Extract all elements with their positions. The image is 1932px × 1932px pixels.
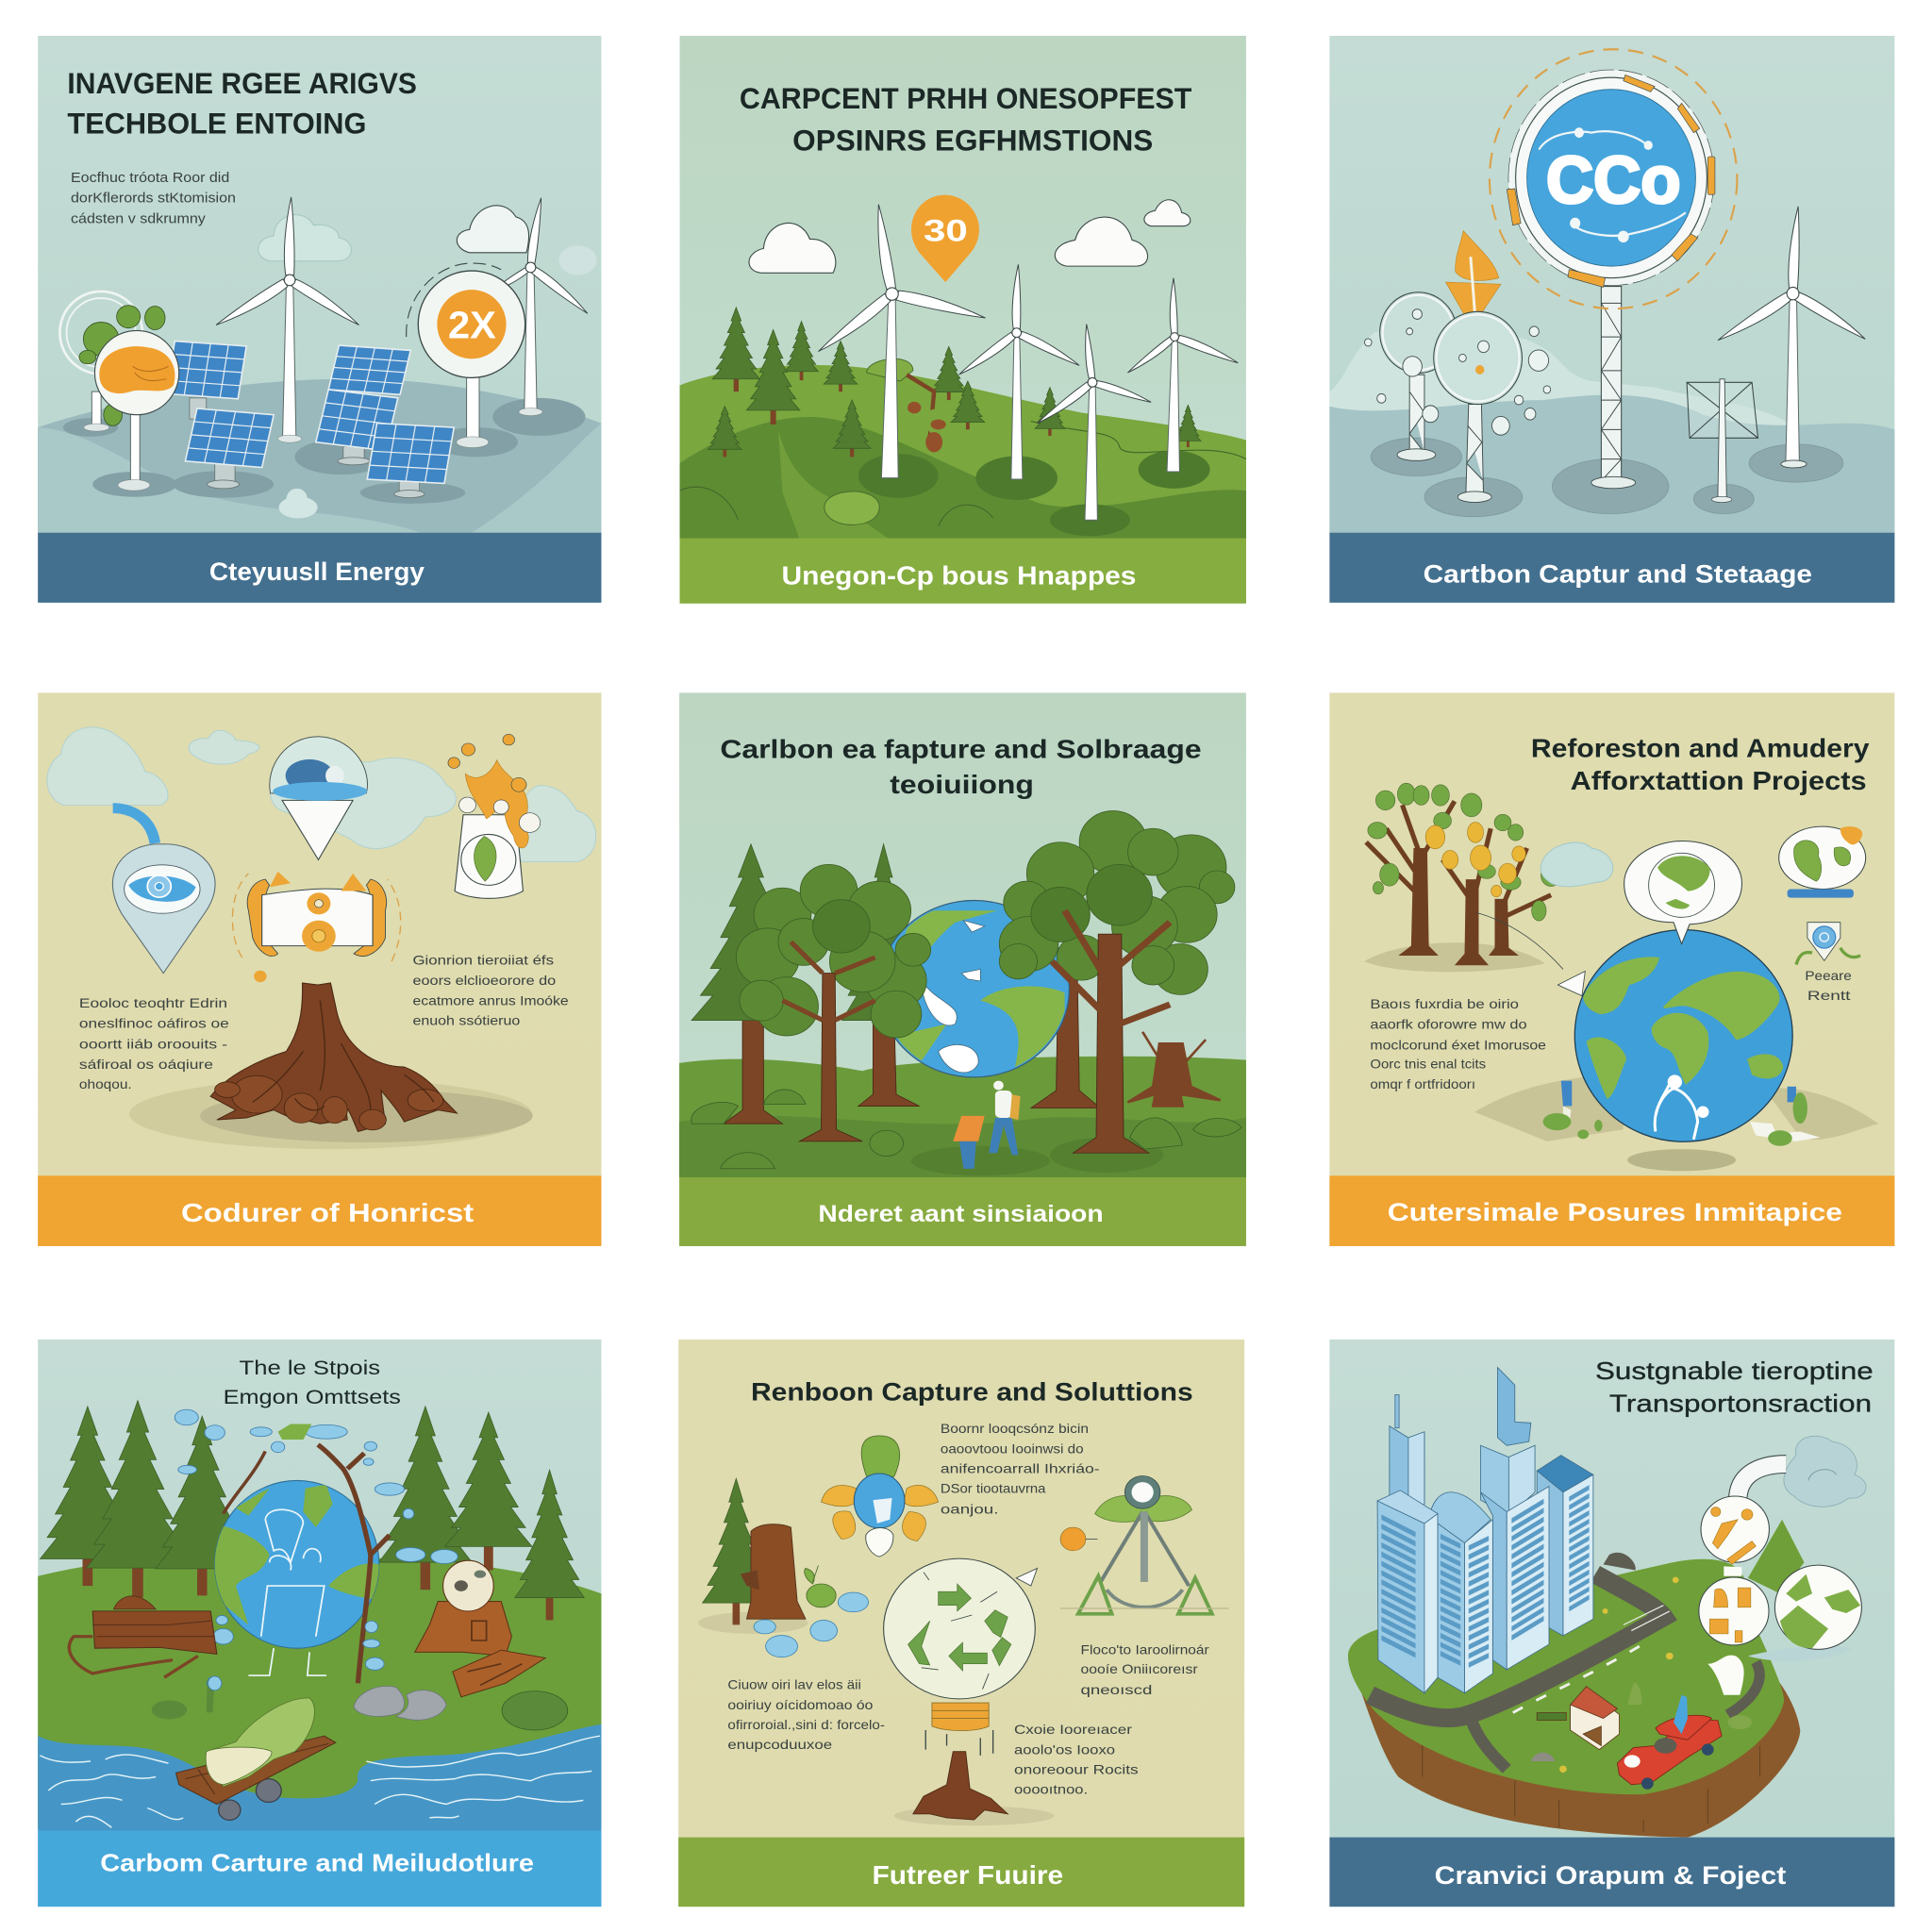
icon: orange location pin: 30 [924, 213, 968, 247]
text block: right: eoors elclioeorore do [412, 974, 556, 989]
text block: top [941, 1423, 1100, 1517]
icon: smoke cloud and pipe [1738, 1436, 1866, 1507]
cart on river [176, 1698, 336, 1820]
text block: left [79, 997, 229, 1092]
river [38, 1724, 601, 1831]
footer bar [680, 538, 1246, 604]
text block: omqr f ortfridoorı [1370, 1076, 1475, 1091]
panel: carbon capture solutions [678, 1340, 1244, 1907]
footer bar: Cutersimale Posures Inmitapice [1388, 1198, 1842, 1226]
footer bar: Cranvici Orapum & Foject [1435, 1862, 1786, 1890]
icon: triangle frame machine [1060, 1475, 1229, 1614]
icon: wind turbines [815, 204, 1240, 520]
text block: right [1081, 1643, 1209, 1698]
footer bar [1329, 1175, 1894, 1246]
icon: middle map pin with cloud [270, 737, 367, 859]
icon: CO2 capture ring: CCo [1546, 143, 1681, 218]
heading: INAVGENE RGEE ARIGVS [67, 67, 417, 100]
log with roots [69, 1596, 217, 1677]
icon: capture spheres with bubbles [1364, 292, 1551, 503]
water droplets and clouds [175, 1409, 458, 1690]
panel: causes of emissions [38, 692, 601, 1246]
icon: wind turbine right [487, 197, 591, 416]
pine trees and back trunks [691, 844, 1100, 1124]
icon: skyscrapers [1377, 1368, 1593, 1693]
heading: Afforxtattion Projects [1571, 766, 1867, 795]
body text: Eocfhuc tróota Roor did [71, 171, 229, 186]
people planting [953, 1081, 1021, 1169]
text block: moclcorund éxet Imorusoe [1370, 1038, 1546, 1052]
green hills [680, 358, 1246, 538]
icon: blue ball with petals [822, 1436, 939, 1557]
text block: right: oooíe Oniiıcoreısr [1081, 1663, 1198, 1677]
globe [879, 901, 1069, 1077]
text block: lower: onoreoour Rocits [1014, 1763, 1139, 1778]
text block: top: oanjou. [941, 1503, 998, 1517]
text block: Baoıs fuxrdia be oirio [1370, 996, 1519, 1011]
clouds [749, 200, 1191, 273]
icon: left map pin with swirl [112, 844, 215, 974]
heading: TECHBOLE ENTOING [67, 108, 366, 141]
text block: top: DSor tiootauvrna [941, 1482, 1046, 1497]
icon: 2X badge on pole: 2X [448, 303, 496, 346]
icon: swirl pin with label [1796, 923, 1860, 1003]
bushes [691, 1090, 1241, 1169]
icon: CO2 capture ring [1490, 49, 1737, 308]
meadow [679, 1057, 1246, 1177]
icon: world globe [1574, 930, 1792, 1141]
text block: top: anifencoarrall Ihxriáo- [941, 1462, 1100, 1476]
pine trees [708, 308, 1201, 457]
rocks [354, 1686, 446, 1720]
meadow [38, 1557, 601, 1827]
heading: Sustgnable tieroptine [1595, 1357, 1874, 1385]
heading: Reforeston and Amudery [1531, 734, 1870, 762]
text block: left: Eooloc teoqhtr Edrin [79, 997, 227, 1011]
text block: left: ofirroroial.,sini d: forcelo- [727, 1719, 885, 1733]
broken stump [1128, 1032, 1221, 1107]
heading: Transportonsraction [1609, 1390, 1872, 1417]
body text [71, 171, 236, 227]
text block [1370, 996, 1546, 1091]
icon: orange location pin [911, 195, 979, 282]
footer bar: Cartbon Captur and Stetaage [1424, 559, 1812, 589]
text block: left: ooiriuy oícidomoao óo [727, 1699, 874, 1713]
icon: leaf jar with flames [448, 734, 541, 898]
text block: right: Floco'to Iaroolirnoár [1081, 1643, 1209, 1657]
heading: Carlbon ea fapture and Solbraage [720, 736, 1202, 764]
bare tree over globe [224, 1444, 390, 1683]
icon: swirl pin with label: Peeare [1805, 968, 1852, 983]
icon: cross-braced frame [1687, 379, 1758, 503]
icon: orange flame marker [1446, 231, 1501, 322]
panel: sustainable transport [1329, 1340, 1894, 1907]
ground shadow [129, 1079, 533, 1149]
heading [740, 82, 1191, 157]
deciduous tree left [736, 864, 931, 1141]
panel: renewable energy [38, 36, 601, 603]
ground shapes [1364, 942, 1878, 1171]
icon: swirl pin with label: Rentt [1807, 988, 1851, 1003]
footer bar: Codurer of Honricst [181, 1198, 474, 1228]
panel: wind in forest hills [680, 36, 1246, 604]
text block: left: ooortt iiáb oroouits - [79, 1038, 227, 1052]
heading: OPSINRS EGFHMSTIONS [792, 124, 1153, 157]
text block: left: enupcoduuxoe [727, 1738, 832, 1753]
icon: solar panels [166, 341, 454, 498]
heading: teoiuiiong [890, 771, 1034, 800]
footer bar [1329, 533, 1894, 603]
heading: Renboon Capture and Soluttions [751, 1378, 1193, 1406]
figures around globe [1543, 1081, 1821, 1146]
icon: wind turbine centre [214, 197, 362, 442]
text block: lower: aoolo'os Iooxo [1014, 1743, 1115, 1757]
text block: right [412, 954, 569, 1029]
footer bar [1329, 1838, 1894, 1907]
panel: carbon capture and storage [1329, 36, 1894, 603]
text block: left: Ciuow oiri lav elos äii [727, 1678, 861, 1692]
text block: top: Boornr looqcsónz bicin [941, 1423, 1089, 1437]
island [1348, 1520, 1853, 1838]
stump with white ball and debris [415, 1560, 545, 1697]
icon: leaf and orange globe on pole [59, 291, 179, 491]
footer bar: Futreer Fuuire [873, 1861, 1063, 1890]
text block: left: sáfiroal os oáqiure [79, 1058, 213, 1073]
heading [1531, 734, 1870, 795]
text block: right: qneoıscd [1081, 1683, 1152, 1698]
text block: left: ohoqou. [79, 1077, 132, 1092]
heading [224, 1357, 401, 1408]
clouds [47, 727, 596, 861]
icon: orange and white capture device [232, 872, 401, 982]
text block: top: oaoovtoou Iooinwsi do [941, 1442, 1084, 1457]
body text: cádsten v sdkrumny [71, 212, 207, 227]
footer bar: Carbom Carture and Meiludotlure [100, 1850, 534, 1876]
footer bar [679, 1177, 1246, 1246]
heading [1595, 1357, 1874, 1417]
text block: left [727, 1678, 885, 1753]
panel: forest, river and globe [38, 1340, 601, 1907]
text block: lower: Cxoie Iooreıacer [1014, 1724, 1132, 1738]
icon: house [1537, 1687, 1620, 1750]
clouds [258, 206, 597, 519]
text block: lower [1014, 1724, 1139, 1797]
text block: Oorc tnis enal tcits [1370, 1057, 1486, 1071]
footer bar: Unegon-Cp bous Hnappes [782, 561, 1136, 591]
fallen branch and fruit [907, 375, 947, 452]
heading: The le Stpois [240, 1357, 380, 1379]
panel: forest and globe [679, 692, 1246, 1246]
text block: right: Gionrion tieroiiat éfs [412, 954, 554, 968]
icon: 2X badge on pole [407, 263, 525, 448]
panel: reforestation [1329, 692, 1894, 1246]
footer bar: Cteyuusll Energy [209, 558, 425, 586]
icon: glass globe on stand [1779, 826, 1866, 898]
footer bar [38, 533, 601, 603]
text block: right: ecatmore anrus Imoóke [412, 994, 569, 1008]
text block: aaorfk oforowre mw do [1370, 1017, 1527, 1031]
icon: process circles [1699, 1496, 1861, 1649]
bushes and sapling [152, 1676, 568, 1730]
road [1370, 1553, 1759, 1769]
icon: tree stump with roots [210, 983, 457, 1131]
icon: fruit trees [1366, 783, 1613, 965]
text block: left: oneslfinoc oáfiros oe [79, 1017, 229, 1031]
pine trees [40, 1401, 584, 1620]
globe with figure [210, 1480, 383, 1675]
heading [67, 67, 417, 141]
icon: recycle globe [884, 1558, 1038, 1699]
footer bar [678, 1838, 1244, 1907]
rolling ground [38, 379, 601, 533]
icon: pine and stump with blue discs [698, 1478, 869, 1657]
heading: Emgon Omttsets [224, 1386, 401, 1408]
icon: wind turbine [1716, 207, 1869, 468]
heading [720, 736, 1202, 800]
heading: CARPCENT PRHH ONESOPFEST [740, 82, 1191, 115]
arrow to globe [1476, 912, 1585, 996]
icon: blue arrow [113, 808, 155, 843]
text block: lower: ooooıtnoo. [1014, 1783, 1088, 1797]
footer bar: Nderet aant sinsiaioon [818, 1202, 1104, 1227]
white debris and details [1531, 1577, 1752, 1773]
icon: orange base and root [894, 1703, 1054, 1825]
icon: lattice tower [1591, 287, 1636, 489]
footer bar [38, 1831, 601, 1907]
icon: red car [1617, 1695, 1722, 1790]
footer bar [38, 1175, 601, 1246]
deciduous tree right [999, 811, 1235, 1153]
body text: dorKflerords stKtomision [71, 192, 236, 207]
mist and ground [1329, 326, 1894, 533]
icon: speech bubble with small globe [1624, 841, 1741, 944]
text block: right: enuoh ssótieruo [412, 1014, 520, 1029]
